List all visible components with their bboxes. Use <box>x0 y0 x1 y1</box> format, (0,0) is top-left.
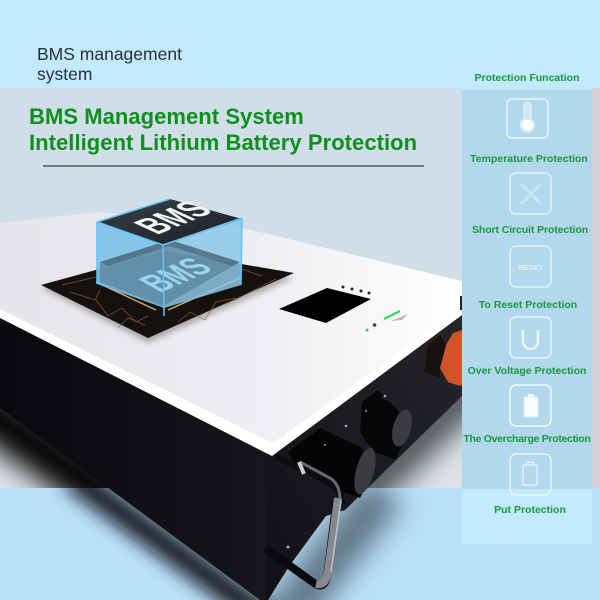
label: put: Put Protection <box>494 504 566 516</box>
shadow under battery <box>0 396 462 600</box>
label: reset: To Reset Protection <box>479 299 577 311</box>
main heading: Intelligent Lithium Battery Protection <box>29 130 417 155</box>
orange connector <box>440 330 462 386</box>
label: protection function: Protection Funcation <box>474 72 580 84</box>
heading underline <box>43 165 424 167</box>
battery body left face <box>0 316 270 600</box>
indicator dots <box>342 286 370 294</box>
label: over voltage: Over Voltage Protection <box>468 365 586 377</box>
display screen <box>279 288 371 323</box>
icon: reset <box>510 246 551 287</box>
icon: reset: RESET <box>518 263 543 272</box>
top-left label <box>37 44 182 84</box>
carry handle <box>265 457 342 585</box>
label: temperature: Temperature Protection <box>470 153 588 165</box>
icon: overcharge battery <box>510 385 551 426</box>
label: overcharge: The Overcharge Protection <box>463 433 591 445</box>
battery body right face <box>266 313 462 600</box>
battery white top slab <box>0 212 462 443</box>
BMS glass cube: BMS <box>124 196 223 239</box>
icon: over voltage U <box>510 317 551 358</box>
BMS chip board <box>41 251 294 343</box>
icon: put battery outline <box>510 454 551 495</box>
side panel <box>462 46 592 544</box>
main heading: BMS Management System <box>29 104 304 129</box>
label: short circuit: Short Circuit Protection <box>472 224 588 236</box>
top-left label: system <box>37 64 92 84</box>
icon: thermometer <box>507 99 548 138</box>
BMS glass cube <box>97 196 242 316</box>
icon: short circuit cross <box>510 173 551 214</box>
status LEDs <box>366 311 408 332</box>
main heading <box>29 104 417 155</box>
top-left label: BMS management <box>37 44 182 64</box>
BMS glass cube: BMS <box>130 253 223 298</box>
terminals <box>288 390 416 498</box>
